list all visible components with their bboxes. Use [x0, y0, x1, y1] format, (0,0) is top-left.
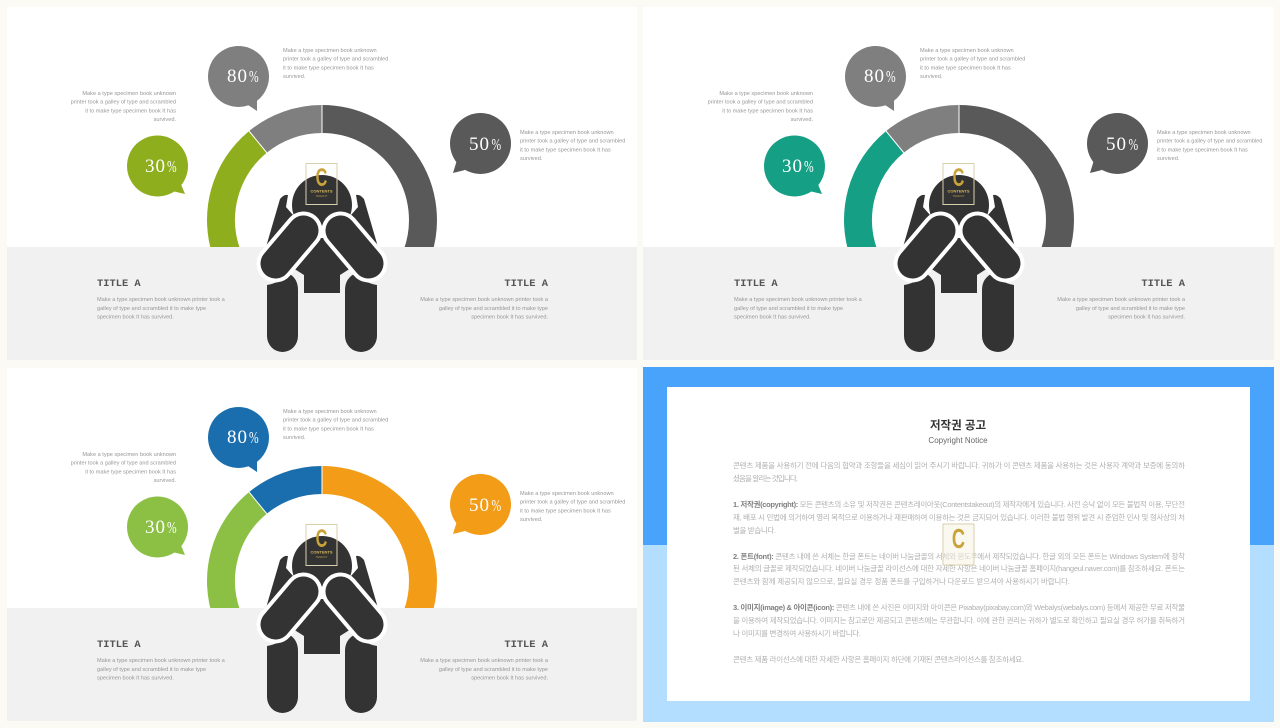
- bubble: 80%: [845, 46, 906, 111]
- text: 50% description: printer took a galley of type and scrambled: [520, 500, 625, 506]
- text: section 1: 벌을 받습니다.: [733, 525, 776, 535]
- bubble: 30%: [127, 496, 188, 558]
- bubble: 30%: [764, 136, 825, 196]
- text: section 2: [733, 551, 1185, 586]
- bubble: 50%: [450, 113, 511, 174]
- text: section 1: 1. 저작권(copyright): 모든 콘텐츠의 소유 및 저작권은 콘텐츠레이아웃(Contentstakeout)의 제작자에게 있습니다. 사전 승낙 없이 모든 불법적 이용, 무단전: [733, 499, 1185, 509]
- text: left description: Make a type specimen book unknown printer took a: [97, 658, 226, 664]
- text: 30% description: Make a type specimen book unknown: [82, 452, 176, 458]
- watermark logo: C: [952, 524, 965, 555]
- text: intro: 콘텐츠 제품을 사용하기 전에 다음의 협약과 조항들을 세심이 읽어 주시기 바랍니다. 귀하가 이 콘텐츠 제품을 사용하는 것은 사용자 계약과 보증에 동의하: [733, 460, 1185, 470]
- text: 80% description: printer took a galley of type and scrambled: [920, 57, 1025, 63]
- icon: person covering face: [266, 175, 378, 352]
- text: 30% description: survived.: [154, 478, 176, 484]
- bubble: 30%: 30: [782, 156, 803, 177]
- text: 50% description: survived.: [1157, 156, 1180, 162]
- text: 50% description: it to make type specimen book It has: [520, 147, 611, 153]
- title left: TITLE A: [97, 639, 141, 651]
- text: left description: specimen book It has survived.: [97, 676, 174, 682]
- text: 80% description: survived.: [283, 74, 306, 80]
- panel: teal slide: [643, 7, 1274, 360]
- bubble: 30%: 30: [145, 156, 166, 177]
- text: right description: Make a type specimen book unknown printer took a: [420, 658, 549, 664]
- text: 30% description: Make a type specimen book unknown: [82, 91, 176, 97]
- text: section 3: 나 이미지를 변경하여 사용하시기 바랍니다.: [733, 628, 861, 638]
- text: 30% description: it to make type specimen book It has: [85, 469, 176, 475]
- text: right description: specimen book It has survived.: [471, 314, 548, 320]
- text: 80% description: Make a type specimen book unknown: [283, 48, 377, 54]
- donut chart: [858, 105, 1060, 254]
- text: 80% description: it to make type specimen book It has: [920, 65, 1011, 71]
- bubble: 80%: %: [886, 68, 896, 87]
- bubble: 80%: [208, 46, 269, 111]
- logo watermark: CONTENTS: [310, 188, 333, 194]
- panel: grey slide: [7, 7, 637, 360]
- text: 50% description: Make a type specimen book unknown: [1157, 130, 1251, 136]
- bubble: 80%: 80: [227, 427, 248, 448]
- text: 50% description: survived.: [520, 156, 543, 162]
- bubble: 30%: [127, 136, 188, 196]
- donut chart: [221, 466, 423, 616]
- text: right description: specimen book It has survived.: [471, 676, 548, 682]
- text: left description: galley of type and scrambled it to make type: [97, 306, 206, 312]
- text: right description: galley of type and scrambled it to make type: [1076, 306, 1185, 312]
- logo watermark: TAKEOUT: [315, 555, 328, 559]
- bubble: 80%: 80: [227, 66, 248, 87]
- icon: person covering face: [903, 175, 1015, 352]
- text: section 2: 콘텐츠와 함께 제공되지 않으므로, 필요실 경우 정품 폰트를 구입하거나 다운로드 받으셔야 사용하시기 바랍니다.: [733, 576, 1070, 586]
- heading: copyright notice: 저작권 공고: [930, 418, 986, 432]
- text: 50% description: it to make type specimen book It has: [1157, 147, 1248, 153]
- text: 50% description: survived.: [520, 517, 543, 523]
- text: section 3: 을 이용하여 제작되었습니다. 이미지는 참고로만 제공되고 콘텐츠에는 무관합니다. 이에 관한 권리는 귀하가 별도로 확인하고 필요실 경우 허가를 취득하거: [733, 615, 1185, 625]
- logo watermark: [306, 164, 337, 204]
- bubble: 50%: %: [1128, 136, 1138, 155]
- text: left description: galley of type and scrambled it to make type: [97, 667, 206, 673]
- logo watermark: C: [316, 165, 327, 192]
- text: left description: specimen book It has survived.: [734, 314, 811, 320]
- bubble: 30%: 30: [145, 517, 166, 538]
- subheading: Copyright Notice: [928, 436, 988, 445]
- bubble: 50%: 50: [469, 495, 490, 516]
- text: 50% description: Make a type specimen book unknown: [520, 130, 614, 136]
- watermark logo: [943, 524, 974, 565]
- bubble: 80%: %: [249, 68, 259, 87]
- logo watermark: TAKEOUT: [952, 194, 965, 198]
- text: intro: 셨음을 알리는 것입니다.: [733, 473, 798, 483]
- text: 80% description: survived.: [920, 74, 943, 80]
- text: 80% description: printer took a galley of type and scrambled: [283, 57, 388, 63]
- text: 30% description: survived.: [154, 117, 176, 123]
- text: section 3: 3. 이미지(image) & 아이콘(icon): 콘텐츠 내에 쓴 사진은 이미지와 아이콘은 Pixabay(pixabay.com)와 Webalys(webalys.com) 등에서 제공한 무료 저작물: [733, 602, 1185, 612]
- text: right description: Make a type specimen book unknown printer took a: [1057, 297, 1186, 303]
- text: right description: galley of type and scrambled it to make type: [439, 306, 548, 312]
- bubble: 80%: 80: [864, 66, 885, 87]
- bubble: 30%: %: [167, 519, 177, 538]
- text: section 1: 재, 배포 시 민법에 의거하여 영리 목적으로 이용하거나 재판매하여 이용하는 것은 금지되어 있습니다. 이러한 불법 행위 발견 시 준엄한 민사 및 형사상의 처: [733, 512, 1185, 522]
- text: 50% description: printer took a galley of type and scrambled: [520, 139, 625, 145]
- logo watermark: [943, 164, 974, 204]
- text: left description: Make a type specimen book unknown printer took a: [97, 297, 226, 303]
- bubble: 80%: %: [249, 429, 259, 448]
- text: 80% description: survived.: [283, 435, 306, 441]
- donut chart: [221, 105, 423, 254]
- text: 50% description: Make a type specimen book unknown: [520, 491, 614, 497]
- text: 80% description: printer took a galley of type and scrambled: [283, 418, 388, 424]
- text: right description: Make a type specimen book unknown printer took a: [420, 297, 549, 303]
- bubble: 50%: %: [492, 136, 501, 155]
- title right: TITLE A: [504, 278, 549, 290]
- bubble: 80%: [208, 407, 269, 472]
- logo watermark: TAKEOUT: [315, 194, 328, 198]
- bubble: 30%: %: [804, 158, 814, 177]
- text: 50% description: printer took a galley of type and scrambled: [1157, 139, 1262, 145]
- text: 80% description: it to make type specimen book It has: [283, 65, 374, 71]
- logo watermark: CONTENTS: [948, 188, 970, 194]
- text: right description: galley of type and scrambled it to make type: [439, 667, 548, 673]
- text: 80% description: Make a type specimen book unknown: [920, 48, 1014, 54]
- panel: colour slide: [7, 368, 637, 721]
- logo watermark: C: [953, 165, 964, 192]
- title right: TITLE A: [1141, 278, 1186, 290]
- text: intro: [733, 460, 1185, 483]
- text: 30% description: printer took a galley of type and scrambled: [71, 461, 176, 467]
- text: left description: Make a type specimen book unknown printer took a: [734, 297, 863, 303]
- text: 30% description: printer took a galley of type and scrambled: [71, 100, 176, 106]
- text: section 2: 된 서체의 글꼴로 제작되었습니다. 네이버 나눔글꼴 라이선스에 대한 자세한 사항은 네이버 나눔글꼴 홈페이지(hangeul.naver.com)를 참조하세요. 폰트는: [733, 563, 1185, 573]
- text: 30% description: printer took a galley of type and scrambled: [708, 100, 813, 106]
- text: 80% description: it to make type specimen book It has: [283, 426, 374, 432]
- text: 30% description: it to make type specimen book It has: [722, 108, 813, 114]
- text: section 3: [733, 602, 1185, 638]
- text: 30% description: it to make type specimen book It has: [85, 108, 176, 114]
- bubble: 50%: [1087, 113, 1148, 174]
- text: right description: specimen book It has survived.: [1108, 314, 1185, 320]
- text: 50% description: it to make type specimen book It has: [520, 508, 611, 514]
- logo watermark: [306, 524, 337, 566]
- logo watermark: CONTENTS: [310, 550, 333, 554]
- text: closing: 콘텐츠 제품 라이선스에 대한 자세한 사항은 홈페이지 하단에 기재된 콘텐츠라이선스를 참조하세요.: [733, 654, 1024, 664]
- text: section 1: [733, 499, 1185, 535]
- title left: TITLE A: [734, 278, 778, 290]
- text: left description: galley of type and scrambled it to make type: [734, 306, 843, 312]
- bubble: 50%: 50: [469, 134, 490, 155]
- bubble: 50%: %: [492, 497, 501, 516]
- text: 30% description: Make a type specimen book unknown: [719, 91, 813, 97]
- icon: person covering face: [266, 536, 378, 713]
- bubble: 30%: %: [167, 158, 177, 177]
- text: 30% description: survived.: [791, 117, 813, 123]
- text: left description: specimen book It has survived.: [97, 314, 174, 320]
- title left: TITLE A: [97, 278, 141, 290]
- panel: copyright notice: [643, 367, 1274, 722]
- text: section 2: 2. 폰트(font): 콘텐츠 내에 쓴 서체는 한글 폰트는 네이버 나눔글꼴의 서체와 윈도우에서 제작되었습니다. 한글 외의 모든 폰트는 Windows System에 장착: [733, 551, 1185, 561]
- bubble: 50%: [450, 474, 511, 535]
- bubble: 50%: 50: [1106, 134, 1127, 155]
- text: 80% description: Make a type specimen book unknown: [283, 409, 377, 415]
- logo watermark: C: [316, 526, 327, 553]
- title right: TITLE A: [504, 639, 549, 651]
